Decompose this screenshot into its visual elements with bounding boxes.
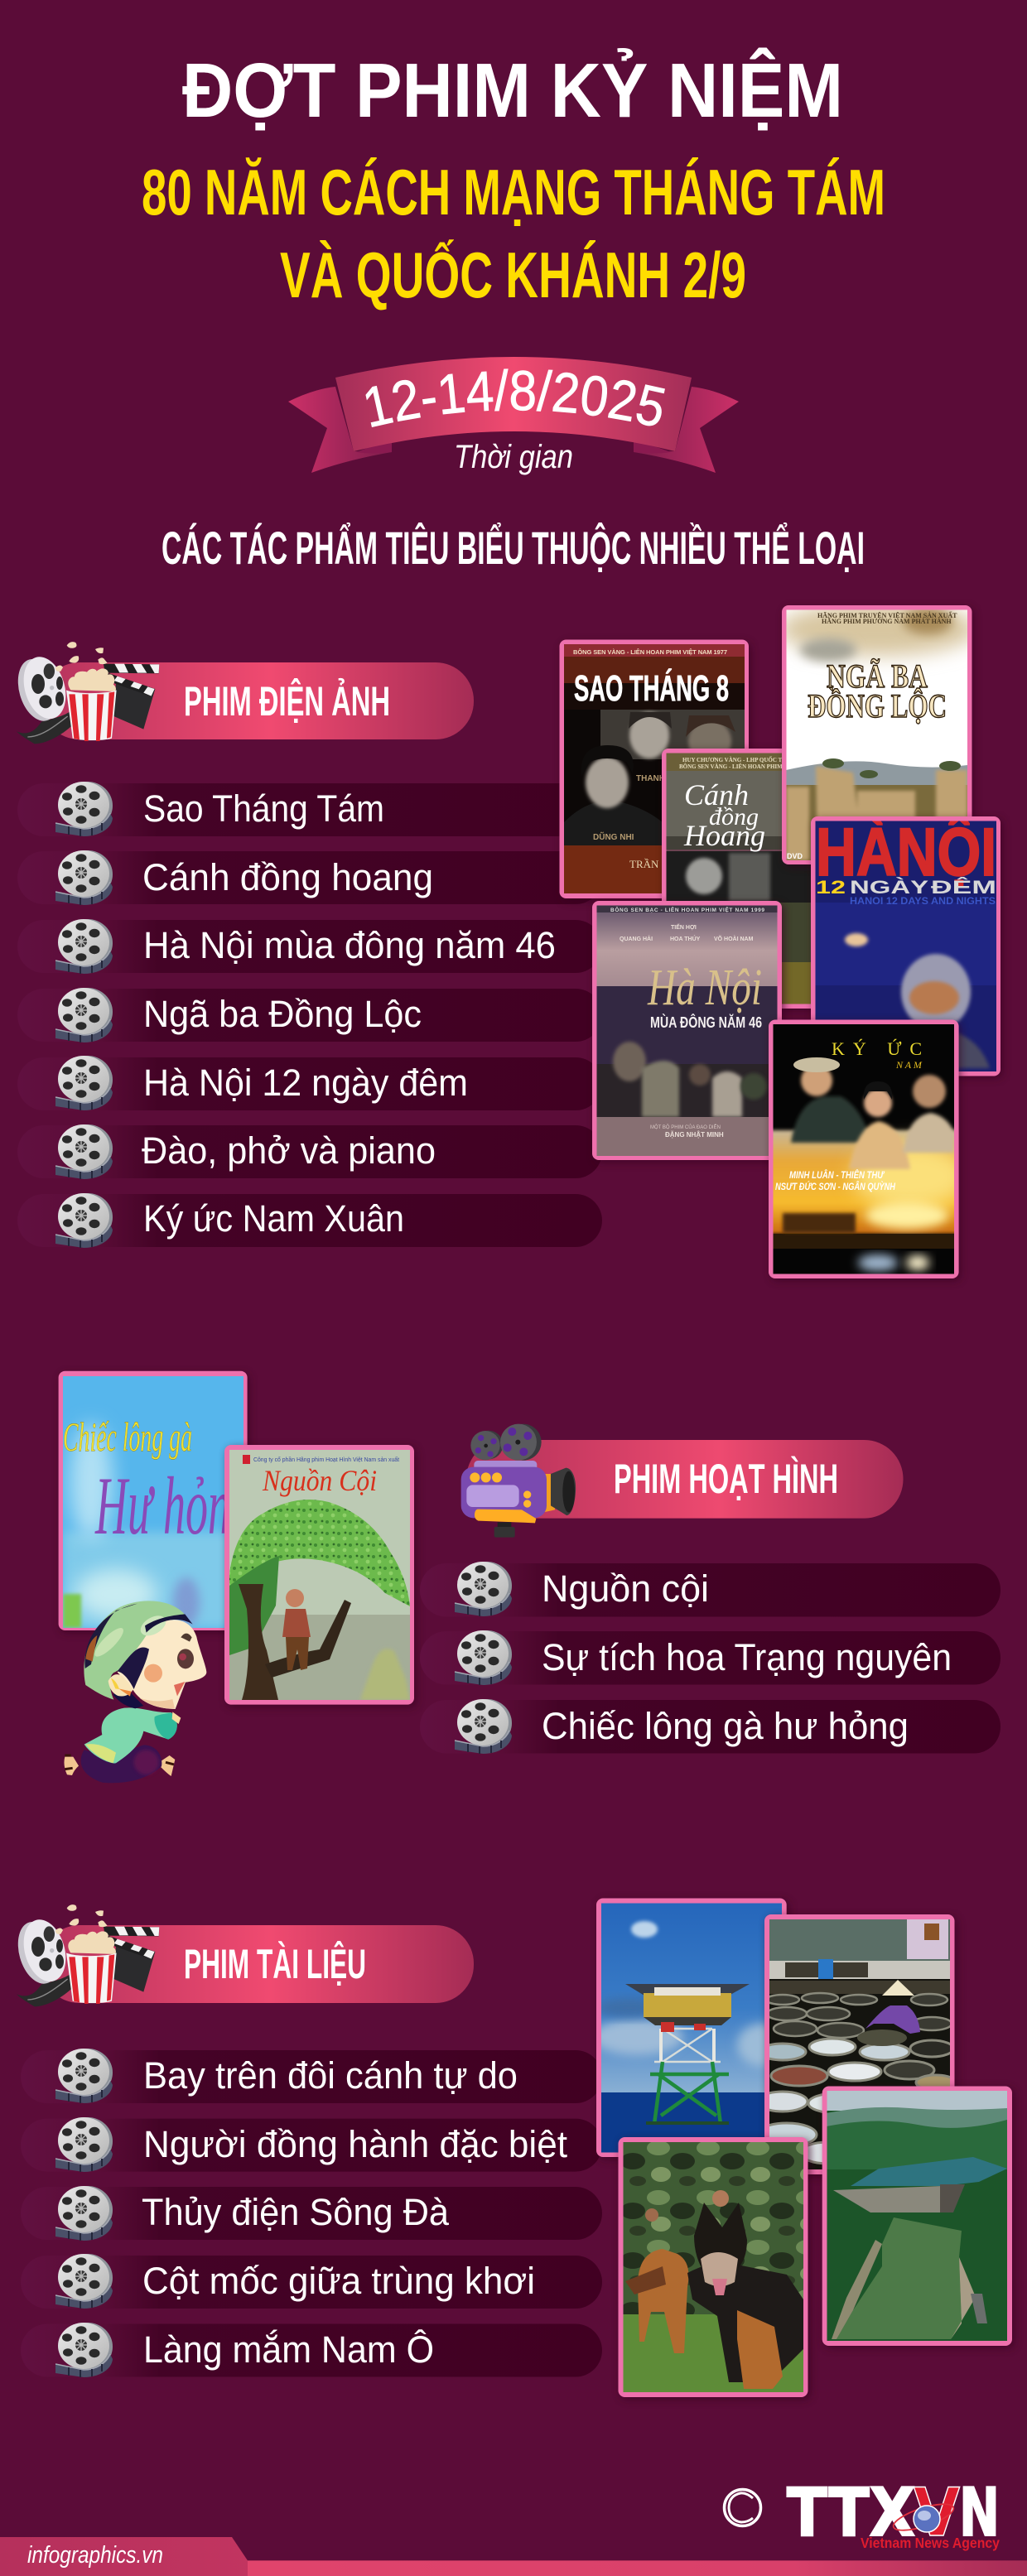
poster: Cánh đồng hoang: HUY CHƯƠNG VÀNG - LHP QUỐC TẾ [682, 757, 786, 763]
title: VÀ QUỐC KHÁNH 2/9 [280, 238, 746, 311]
heading: phim điện ảnh [41, 662, 474, 739]
list: feature films: Hà Nội 12 ngày đêm [143, 1062, 468, 1104]
poster: Sao Tháng 8: THANH [636, 774, 665, 783]
poster: Sao Tháng 8: DŨNG NHI [593, 831, 634, 842]
poster: Ký ức Nam Xuân [766, 1020, 969, 1281]
poster: Hà Nội mùa đông năm 46: ĐẶNG NHẬT MINH [665, 1131, 724, 1139]
poster: Cánh đồng hoang: đồng [709, 803, 759, 831]
poster: Nguồn Cội: Công ty cổ phần Hãng phim Hoạt Hình Việt Nam sản xuất [253, 1456, 399, 1463]
list: documentaries: Thủy điện Sông Đà [142, 2191, 450, 2233]
poster: Hà Nội mùa đông năm 46: BÔNG SEN BẠC - LIÊN HOAN PHIM VIỆT NAM 1999 [610, 906, 764, 913]
list: feature films: Ký ức Nam Xuân [143, 1197, 404, 1240]
poster: Nguồn Cội: Nguồn Cội [262, 1464, 377, 1497]
panel: phim tài liệu [12, 1898, 1015, 2400]
date ribbon [288, 357, 739, 473]
list: feature films: Cánh đồng hoang [142, 856, 433, 898]
poster: Hà Nội 12 ngày đêm: HANOI 12 DAYS AND NIGHTS [850, 895, 996, 907]
list: documentaries: Bay trên đôi cánh tự do [143, 2054, 518, 2097]
list: feature films [17, 782, 602, 1248]
photo: fish sauce village [757, 1914, 957, 2177]
list: feature films: Sao Tháng Tám [143, 787, 384, 830]
list: feature films: Ngã ba Đồng Lộc [143, 993, 422, 1035]
photo: offshore platform [592, 1898, 789, 2160]
footer band [0, 2537, 1027, 2576]
poster: Hà Nội 12 ngày đêm [811, 815, 1003, 1078]
poster: Sao Tháng 8: BÔNG SEN VÀNG - LIÊN HOAN PHIM VIỆT NAM 1977 [573, 648, 727, 656]
list: documentaries [21, 2049, 602, 2377]
poster: Cánh đồng hoang: BÔNG SEN VÀNG - LIÊN HOAN PHIM [679, 763, 783, 770]
heading: phim tài liệu [41, 1925, 474, 2003]
poster: Sao Tháng 8: TRẦN [629, 858, 659, 870]
logo: TTXVN: Vietnam News Agency [861, 2535, 1000, 2551]
poster: Ngã ba Đồng Lộc: HÃNG PHIM PHƯƠNG NAM PHÁT HÀNH [822, 617, 952, 625]
title [142, 47, 885, 311]
poster: Hà Nội 12 ngày đêm: 12 [816, 877, 846, 898]
panel: phim hoạt hình [59, 1371, 1000, 1783]
poster: Ngã ba Đồng Lộc: NGÃ BA [827, 657, 928, 695]
footer [0, 2474, 1027, 2576]
list: animated films: Chiếc lông gà hư hỏng [542, 1705, 909, 1747]
poster: Nguồn Cội [224, 1445, 417, 1707]
logo: TTXVN: N [959, 2474, 1000, 2551]
poster: Hà Nội mùa đông năm 46: VÕ HOÀI NAM [714, 935, 754, 942]
poster: Cánh đồng hoang: Cánh [684, 778, 749, 811]
poster: Cánh đồng hoang [662, 749, 831, 1011]
poster: Hà Nội 12 ngày đêm: ĐÊM [931, 877, 996, 898]
heading: phim điện ảnh: PHIM ĐIỆN ẢNH [184, 678, 390, 725]
illustration: running girl [64, 1601, 206, 1783]
logo: TTXVN: TTX [787, 2474, 915, 2551]
photo: service dogs [618, 2137, 811, 2400]
panel: phim điện ảnh [12, 603, 1003, 1281]
poster: Hà Nội mùa đông năm 46: TIẾN HỢI [671, 922, 697, 931]
poster: Hà Nội mùa đông năm 46 [592, 901, 784, 1163]
list: documentaries: Làng mắm Nam Ô [143, 2328, 434, 2371]
icon: popcorn, reel and clapper [12, 642, 159, 744]
website label: infographics.vn [27, 2542, 163, 2569]
poster: Hà Nội 12 ngày đêm: NGÀY [850, 877, 928, 898]
list: animated films [420, 1562, 1000, 1754]
photo: Sông Đà dam [822, 2087, 1015, 2348]
list: documentaries: Cột mốc giữa trùng khơi [142, 2260, 535, 2302]
date ribbon: 12-14/8/2025 [366, 368, 665, 427]
list: documentaries: Người đồng hành đặc biệt [143, 2123, 567, 2165]
poster: Hà Nội mùa đông năm 46: HOA THÚY [670, 935, 701, 942]
list: animated films: Nguồn cội [542, 1567, 709, 1610]
date caption: Thời gian [454, 439, 573, 475]
poster: Ký ức Nam Xuân: NSƯT ĐỨC SƠN - NGÂN QUỲNH [775, 1182, 896, 1192]
poster: Ký ức Nam Xuân: MINH LUÂN - THIÊN THƯ [789, 1170, 885, 1181]
poster: Sao Tháng 8 [560, 639, 751, 902]
icon: popcorn, reel and clapper [12, 1904, 159, 2006]
logo: TTXVN [787, 2474, 1000, 2551]
list: animated films: Sự tích hoa Trạng nguyên [542, 1636, 952, 1678]
poster: Hà Nội mùa đông năm 46: MỘT BỘ PHIM CỦA ĐẠO DIỄN [650, 1124, 721, 1130]
poster: Hà Nội mùa đông năm 46: QUANG HẢI [620, 935, 653, 942]
poster: Ký ức Nam Xuân: KÝ ỨC [832, 1038, 922, 1059]
poster: Ngã ba Đồng Lộc [779, 603, 977, 867]
poster: Chiếc lông gà hư hỏng [59, 1371, 253, 1633]
poster: Ngã ba Đồng Lộc: DVD [787, 852, 803, 860]
copyright symbol [724, 2489, 760, 2525]
list: feature films: Hà Nội mùa đông năm 46 [143, 924, 556, 966]
list: feature films: Đào, phở và piano [142, 1129, 436, 1172]
poster: Ký ức Nam Xuân: N A M [895, 1059, 923, 1071]
heading: phim hoạt hình [466, 1440, 903, 1519]
logo: TTXVN: V [914, 2474, 960, 2551]
title: ĐỢT PHIM KỶ NIỆM [182, 47, 843, 133]
heading: phim hoạt hình: PHIM HOẠT HÌNH [614, 1456, 838, 1502]
heading: phim tài liệu: PHIM TÀI LIỆU [184, 1941, 366, 1987]
icon: movie camera [461, 1424, 576, 1538]
poster: Cánh đồng hoang: Hoang [683, 819, 765, 852]
poster: Ngã ba Đồng Lộc: HÃNG PHIM TRUYỆN VIỆT NAM SẢN XUẤT [817, 611, 957, 619]
